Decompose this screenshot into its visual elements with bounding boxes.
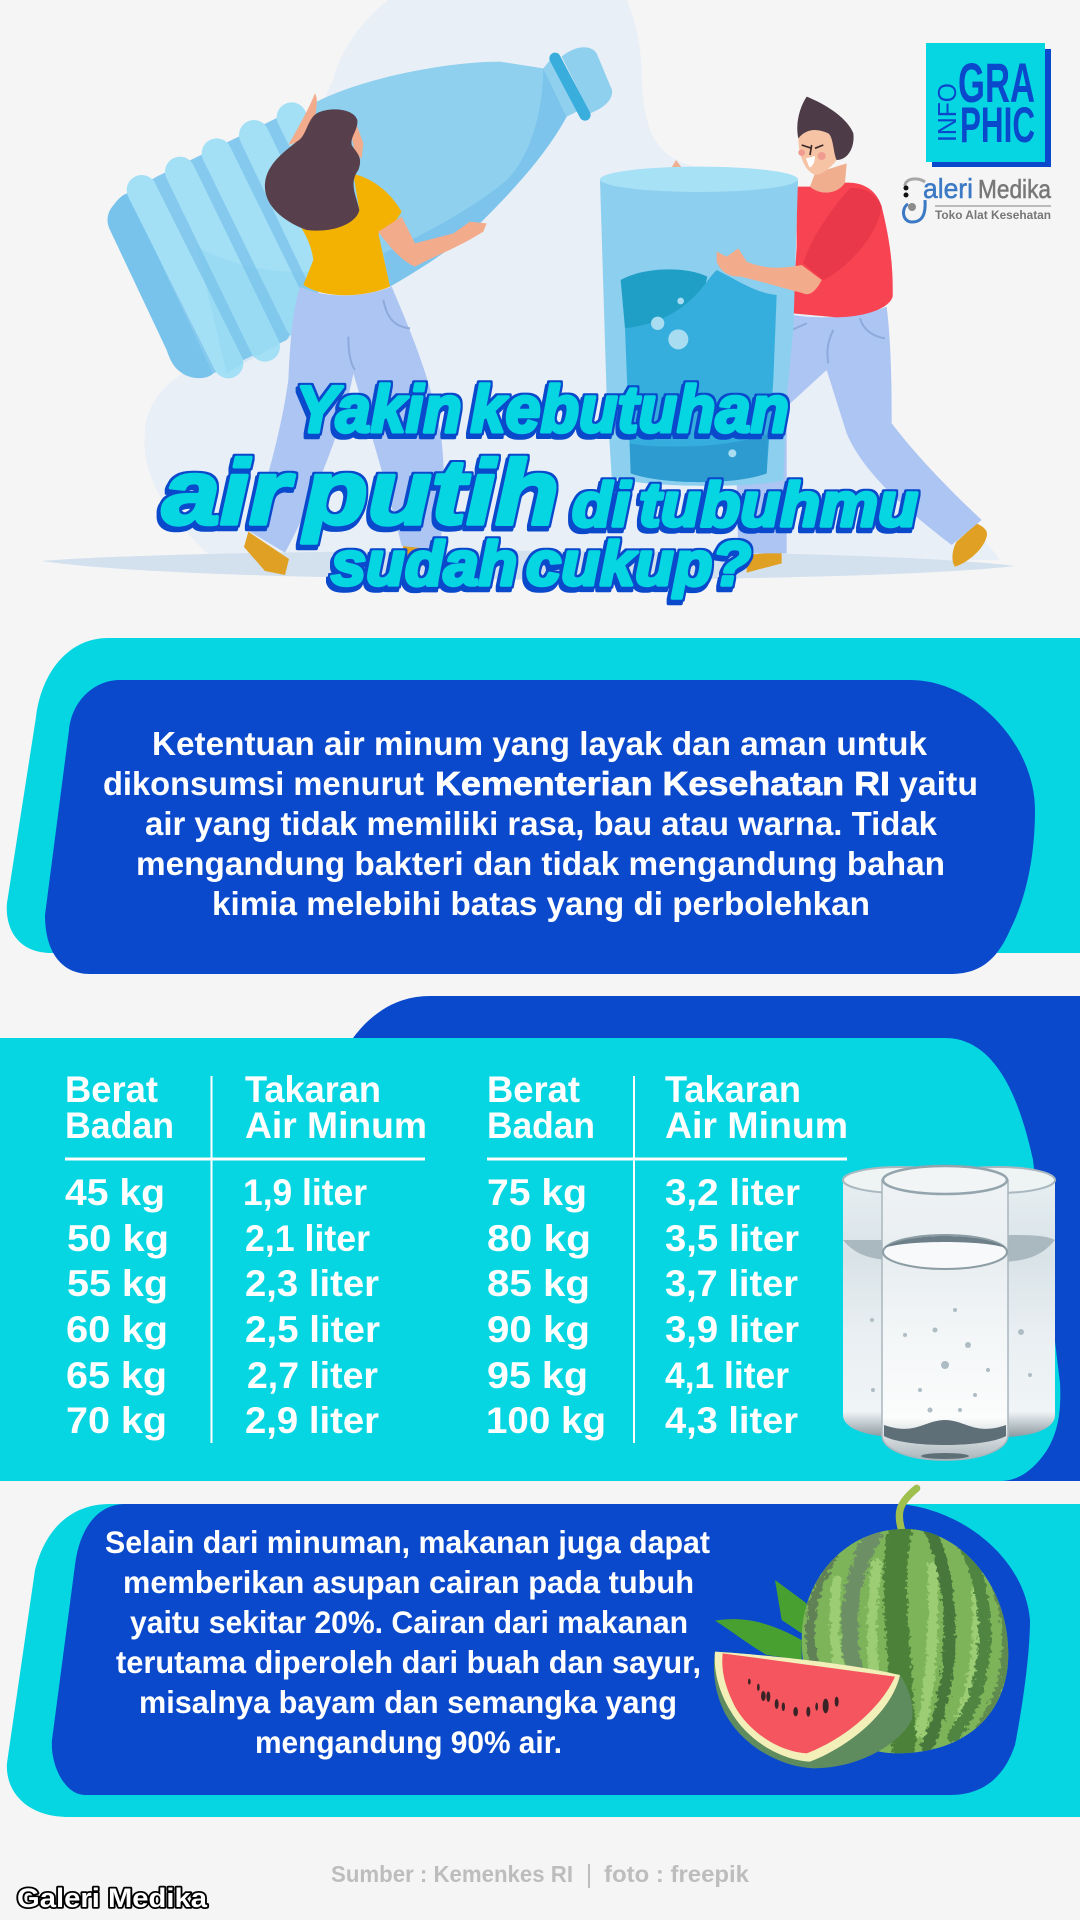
leaves	[715, 1580, 807, 1660]
paragraph: water standard text: air yang tidak memiliki rasa, bau atau warna. Tidak	[145, 805, 938, 842]
paragraph: food text: mengandung 90% air.	[255, 1724, 562, 1760]
table column 4: litres: 3,7 liter	[665, 1263, 798, 1304]
icon: watermelon	[714, 1488, 1010, 1768]
panel: drinking water standards	[7, 638, 1080, 974]
table column 3: weights: 85 kg	[487, 1263, 590, 1304]
table column 4: litres: 3,9 liter	[665, 1309, 799, 1350]
man arm	[717, 248, 822, 294]
woman skin	[288, 93, 363, 158]
table headers: Badan	[65, 1105, 174, 1146]
logo: Galeri Medika: Medika	[978, 174, 1051, 204]
man with big glass	[600, 97, 987, 573]
man shoes	[747, 523, 987, 573]
woman shoes	[244, 532, 441, 575]
paragraph: water standard text: dikonsumsi menurut	[103, 765, 424, 802]
source credit: Sumber : Kemenkes RI	[331, 1861, 573, 1887]
man shirt	[793, 183, 893, 317]
table column 3: weights: 90 kg	[487, 1309, 590, 1350]
table column 1: weights	[65, 1172, 169, 1441]
table headers	[65, 1069, 848, 1146]
paragraph: water standard text: Kementerian Kesehatan RI	[435, 765, 890, 802]
table column 2: litres: 1,9 liter	[243, 1172, 367, 1213]
pale background blob	[144, 0, 1000, 565]
table column 2: litres	[243, 1172, 380, 1441]
logo: infographic badge: GRA	[958, 51, 1035, 114]
table headers: Air Minum	[665, 1105, 848, 1146]
paragraph: water standard text: mengandung bakteri dan tidak mengandung bahan	[136, 845, 945, 882]
paragraph: water standard text: Ketentuan air minum yang layak dan aman untuk	[152, 725, 928, 762]
paragraph: water standard text	[103, 725, 978, 922]
table column 4: litres	[665, 1172, 800, 1441]
ground shadow	[42, 551, 1015, 580]
logo: Galeri Medika: aleri	[923, 173, 973, 204]
source credit	[331, 1861, 749, 1888]
icon: three glasses of water	[843, 1166, 1055, 1460]
table headers: Takaran	[665, 1069, 801, 1110]
seeds	[748, 1679, 839, 1717]
logo: infographic badge: PHIC	[960, 97, 1035, 153]
table column 1: weights: 55 kg	[67, 1263, 168, 1304]
big glass of water	[600, 160, 798, 486]
slice rind	[714, 1652, 913, 1768]
paragraph: food text: yaitu sekitar 20%. Cairan dari makanan	[130, 1604, 688, 1640]
table column 2: litres: 2,5 liter	[245, 1309, 380, 1350]
table headers: Berat	[487, 1069, 580, 1110]
logo: Galeri Medika: Toko Alat Kesehatan	[935, 208, 1051, 222]
paragraph: food text: misalnya bayam dan semangka yang	[139, 1684, 677, 1720]
table column 4: litres: 3,5 liter	[665, 1218, 799, 1259]
table column 1: weights: 45 kg	[65, 1172, 165, 1213]
table column 1: weights: 50 kg	[67, 1218, 169, 1259]
slice flesh	[722, 1653, 895, 1753]
paragraph: water standard text: kimia melebihi batas yang di perbolehkan	[212, 885, 870, 922]
paragraph: food text	[105, 1524, 710, 1760]
logo: infographic badge	[926, 43, 1051, 167]
table column 4: litres: 4,3 liter	[665, 1400, 798, 1441]
table column 1: weights: 70 kg	[66, 1400, 167, 1441]
title: sudah cukup?	[331, 530, 751, 599]
hero illustration: people carrying bottle and glass	[42, 0, 1015, 580]
table column 2: litres: 2,9 liter	[245, 1400, 379, 1441]
melon body	[800, 1523, 1010, 1757]
panel: water intake table	[0, 996, 1080, 1481]
table column 4: litres: 3,2 liter	[665, 1172, 800, 1213]
source credit: foto : freepik	[604, 1861, 749, 1887]
table headers: Badan	[487, 1105, 595, 1146]
man trousers	[737, 307, 982, 553]
stem	[899, 1488, 917, 1530]
table column 3: weights: 100 kg	[486, 1400, 606, 1441]
table column 1: weights: 60 kg	[66, 1309, 168, 1350]
table headers: Takaran	[245, 1069, 381, 1110]
title: air putih	[162, 442, 559, 544]
table column 1: weights: 65 kg	[66, 1355, 167, 1396]
table headers: Berat	[65, 1069, 158, 1110]
paragraph: water standard text: yaitu	[899, 765, 978, 802]
bottle and woman	[107, 47, 612, 575]
paragraph: food text: terutama diperoleh dari buah dan sayur,	[116, 1644, 701, 1680]
table column 3: weights	[486, 1172, 606, 1441]
table column 3: weights: 75 kg	[487, 1172, 587, 1213]
woman trousers	[250, 287, 444, 553]
table column 2: litres: 2,7 liter	[247, 1355, 378, 1396]
table column 2: litres: 2,3 liter	[245, 1263, 379, 1304]
woman hair	[265, 109, 360, 231]
woman shirt	[302, 174, 402, 295]
bottle	[107, 47, 612, 378]
paragraph: food text: Selain dari minuman, makanan juga dapat	[105, 1524, 710, 1560]
table column 4: litres: 4,1 liter	[665, 1355, 789, 1396]
table headers: Air Minum	[245, 1105, 427, 1146]
table lines	[65, 1076, 847, 1443]
table column 3: weights: 80 kg	[487, 1218, 591, 1259]
title	[162, 372, 918, 599]
table column 3: weights: 95 kg	[487, 1355, 588, 1396]
panel: fluid from food	[7, 1488, 1080, 1817]
title: di tubuhmu	[572, 471, 918, 540]
paragraph: food text: memberikan asupan cairan pada tubuh	[123, 1564, 694, 1600]
logo: infographic badge: INFO	[932, 83, 962, 142]
man head	[797, 97, 854, 192]
title: Yakin kebutuhan	[296, 372, 789, 446]
watermark: Galeri Medika	[17, 1883, 208, 1913]
woman arm	[378, 217, 487, 267]
logo: Galeri Medika	[903, 173, 1051, 222]
table column 2: litres: 2,1 liter	[245, 1218, 370, 1259]
